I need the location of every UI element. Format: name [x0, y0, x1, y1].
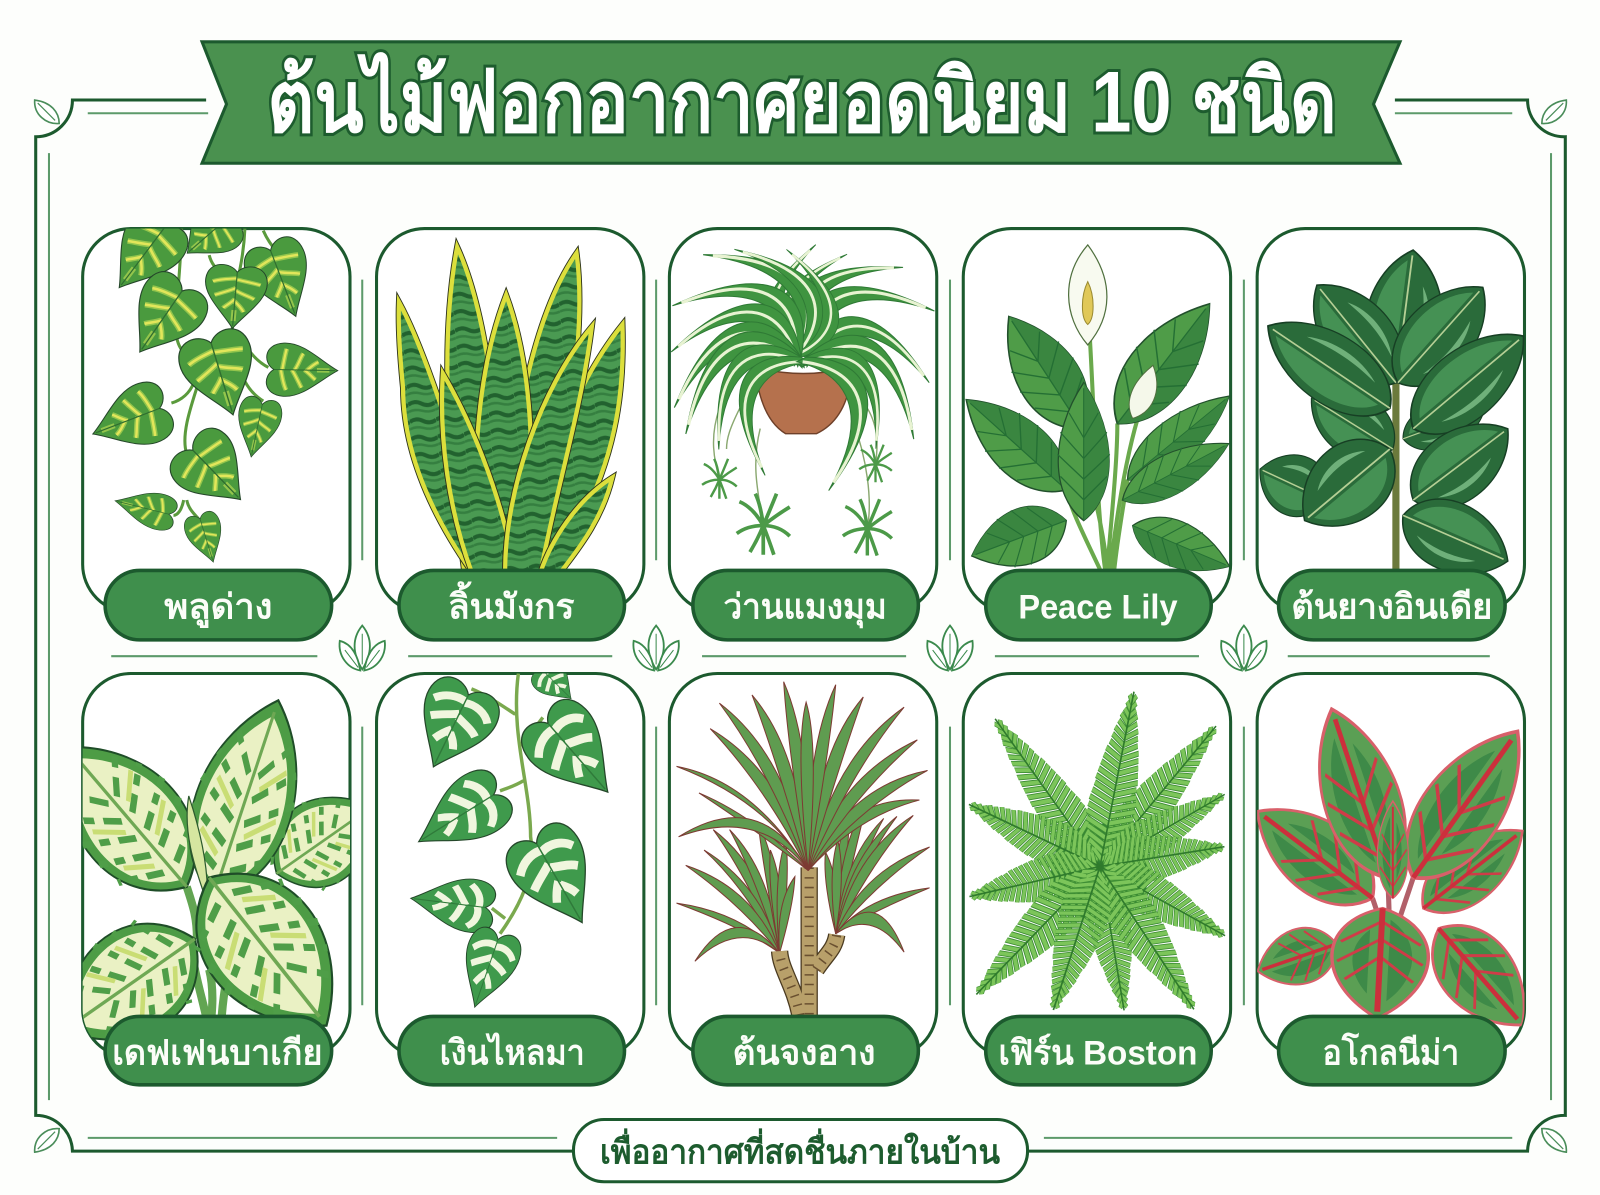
label pill: ต้นยางอินเดีย	[1279, 570, 1505, 640]
title banner	[202, 42, 1400, 163]
left and right lower crowns	[677, 800, 930, 961]
footer tagline	[573, 1119, 1028, 1182]
dividers between cards	[111, 280, 1490, 1005]
label pill: Peace Lily	[986, 570, 1211, 640]
panel: peace lily	[947, 229, 1243, 640]
label pill: Peace Lily: Peace Lily	[1018, 588, 1178, 626]
illustration: boston fern	[968, 692, 1226, 1010]
label pill: ต้นยางอินเดีย: ต้นยางอินเดีย	[1291, 587, 1492, 626]
label pill: ต้นจงอาง	[693, 1016, 918, 1085]
icon: corner leaf top left	[35, 100, 59, 124]
footer tagline: เพื่ออากาศที่สดชื่นภายในบ้าน	[600, 1127, 1000, 1171]
illustration: snake plant	[399, 247, 623, 571]
icon: leaf sprig 1	[340, 626, 385, 670]
panel: dracaena	[669, 674, 937, 1085]
title: ต้นไม้ฟอกอากาศยอดนิยม 10 ชนิด	[267, 53, 1337, 151]
illustration: rubber plant	[1259, 249, 1524, 572]
label pill: เดฟเฟนบาเกีย: เดฟเฟนบาเกีย	[112, 1033, 322, 1072]
icon: leaf sprig 3	[927, 626, 973, 670]
label pill: พลูด่าง	[105, 570, 332, 640]
top crown	[677, 682, 928, 870]
illustration: spider plant	[671, 244, 935, 556]
panel: dieffenbachia	[81, 672, 352, 1087]
label pill: ลิ้นมังกร	[399, 570, 624, 640]
illustration: dieffenbachia	[82, 698, 350, 1040]
label pill: อโกลนีม่า	[1279, 1016, 1505, 1085]
label pill: เดฟเฟนบาเกีย	[105, 1016, 332, 1085]
icon: corner leaf bottom right	[1542, 1129, 1566, 1152]
panel: aglaonema	[1256, 672, 1526, 1087]
illustration: aglaonema	[1257, 706, 1524, 1026]
panel: snake plant	[377, 229, 644, 640]
label pill: เฟิร์น Boston	[986, 1016, 1211, 1085]
label pill: เงินไหลมา: เงินไหลมา	[440, 1031, 585, 1072]
label pill: อโกลนีม่า: อโกลนีม่า	[1322, 1031, 1459, 1072]
icon: leaf sprig 2	[633, 626, 679, 670]
icon: leaf sprig 4	[1221, 626, 1267, 670]
trunk	[780, 867, 837, 1015]
panel: rubber plant	[1247, 229, 1546, 640]
label pill: ต้นจงอาง: ต้นจงอาง	[733, 1034, 876, 1072]
panel: boston fern	[959, 674, 1236, 1085]
panel: silver pothos	[377, 655, 644, 1085]
illustration: peace lily	[965, 244, 1230, 572]
label pill: ลิ้นมังกร: ลิ้นมังกร	[448, 580, 575, 626]
illustration: dracaena tree	[677, 682, 930, 1015]
icon: corner leaf top right	[1542, 100, 1566, 124]
illustration: money plant vine	[410, 674, 609, 1008]
label pill: พลูด่าง: พลูด่าง	[164, 588, 272, 628]
illustration: golden pothos vine	[92, 228, 339, 563]
panel: golden pothos	[82, 194, 350, 640]
label pill: ว่านแมงมุม	[693, 570, 918, 640]
label pill: เฟิร์น Boston: เฟิร์น Boston	[998, 1033, 1197, 1072]
label pill: ว่านแมงมุม: ว่านแมงมุม	[723, 588, 887, 628]
label pill: เงินไหลมา	[399, 1016, 624, 1085]
icon: corner leaf bottom left	[35, 1129, 59, 1152]
panel: spider plant	[662, 218, 941, 640]
